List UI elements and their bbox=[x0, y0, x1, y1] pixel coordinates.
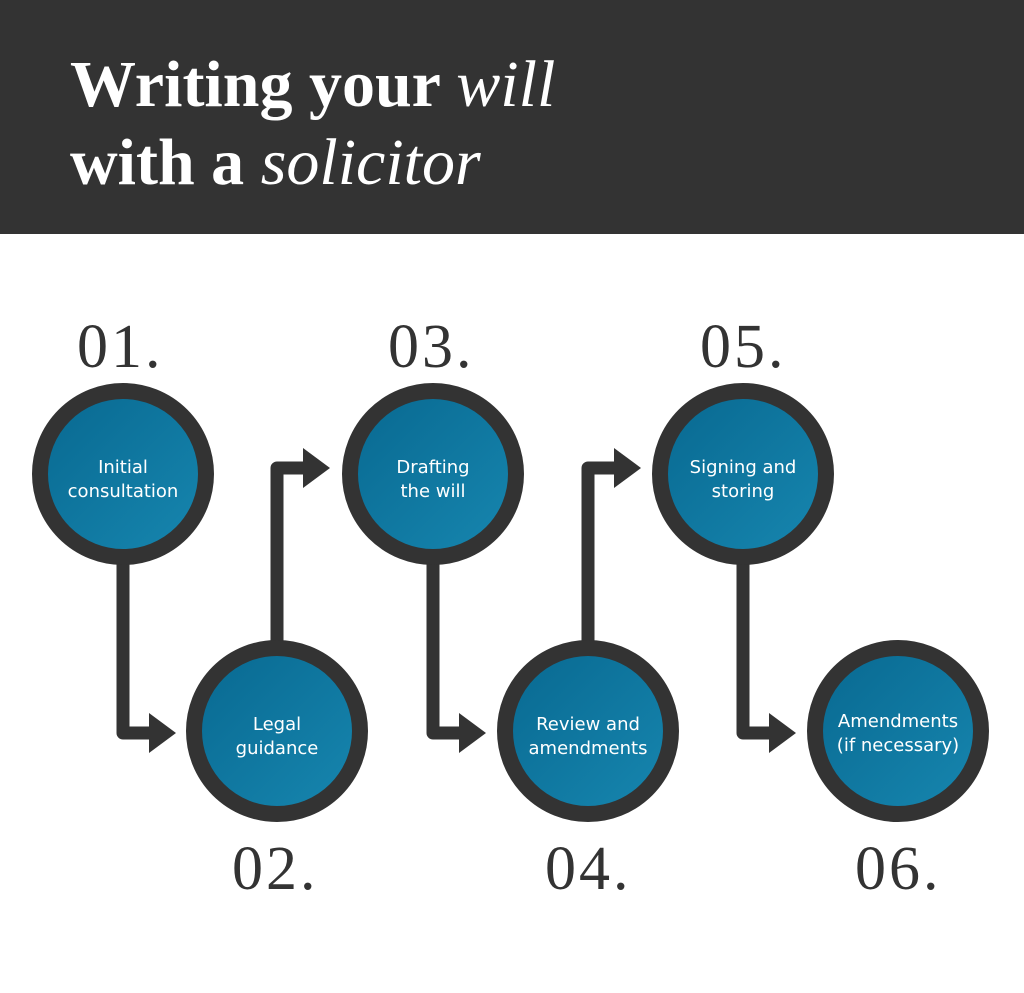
circle labels: amendments bbox=[529, 738, 647, 759]
text: 03. bbox=[388, 313, 474, 381]
circle labels: the will bbox=[400, 481, 466, 502]
title line 2: with a solicitor bbox=[70, 126, 481, 199]
circle labels: (if necessary) bbox=[837, 735, 959, 756]
header banner bbox=[0, 0, 1024, 234]
circle labels: Drafting bbox=[396, 457, 470, 478]
circle labels: storing bbox=[712, 481, 774, 502]
circle labels: Signing and bbox=[690, 457, 796, 478]
text: 04. bbox=[545, 835, 632, 903]
circle labels: Review and bbox=[536, 714, 640, 735]
text: 02. bbox=[232, 835, 318, 903]
arrows bbox=[123, 468, 772, 733]
circle labels: Amendments bbox=[838, 711, 958, 732]
circle labels: consultation bbox=[68, 481, 178, 502]
title line 1: Writing your will bbox=[70, 48, 555, 121]
text: 06. bbox=[855, 835, 942, 903]
step numbers bbox=[77, 313, 942, 903]
text: 05. bbox=[700, 313, 786, 381]
circle labels: Initial bbox=[98, 457, 148, 478]
text: 01. bbox=[77, 313, 164, 381]
circle labels bbox=[68, 457, 959, 759]
circle labels: guidance bbox=[236, 738, 318, 759]
circles bbox=[40, 391, 981, 814]
circle labels: Legal bbox=[253, 714, 301, 735]
